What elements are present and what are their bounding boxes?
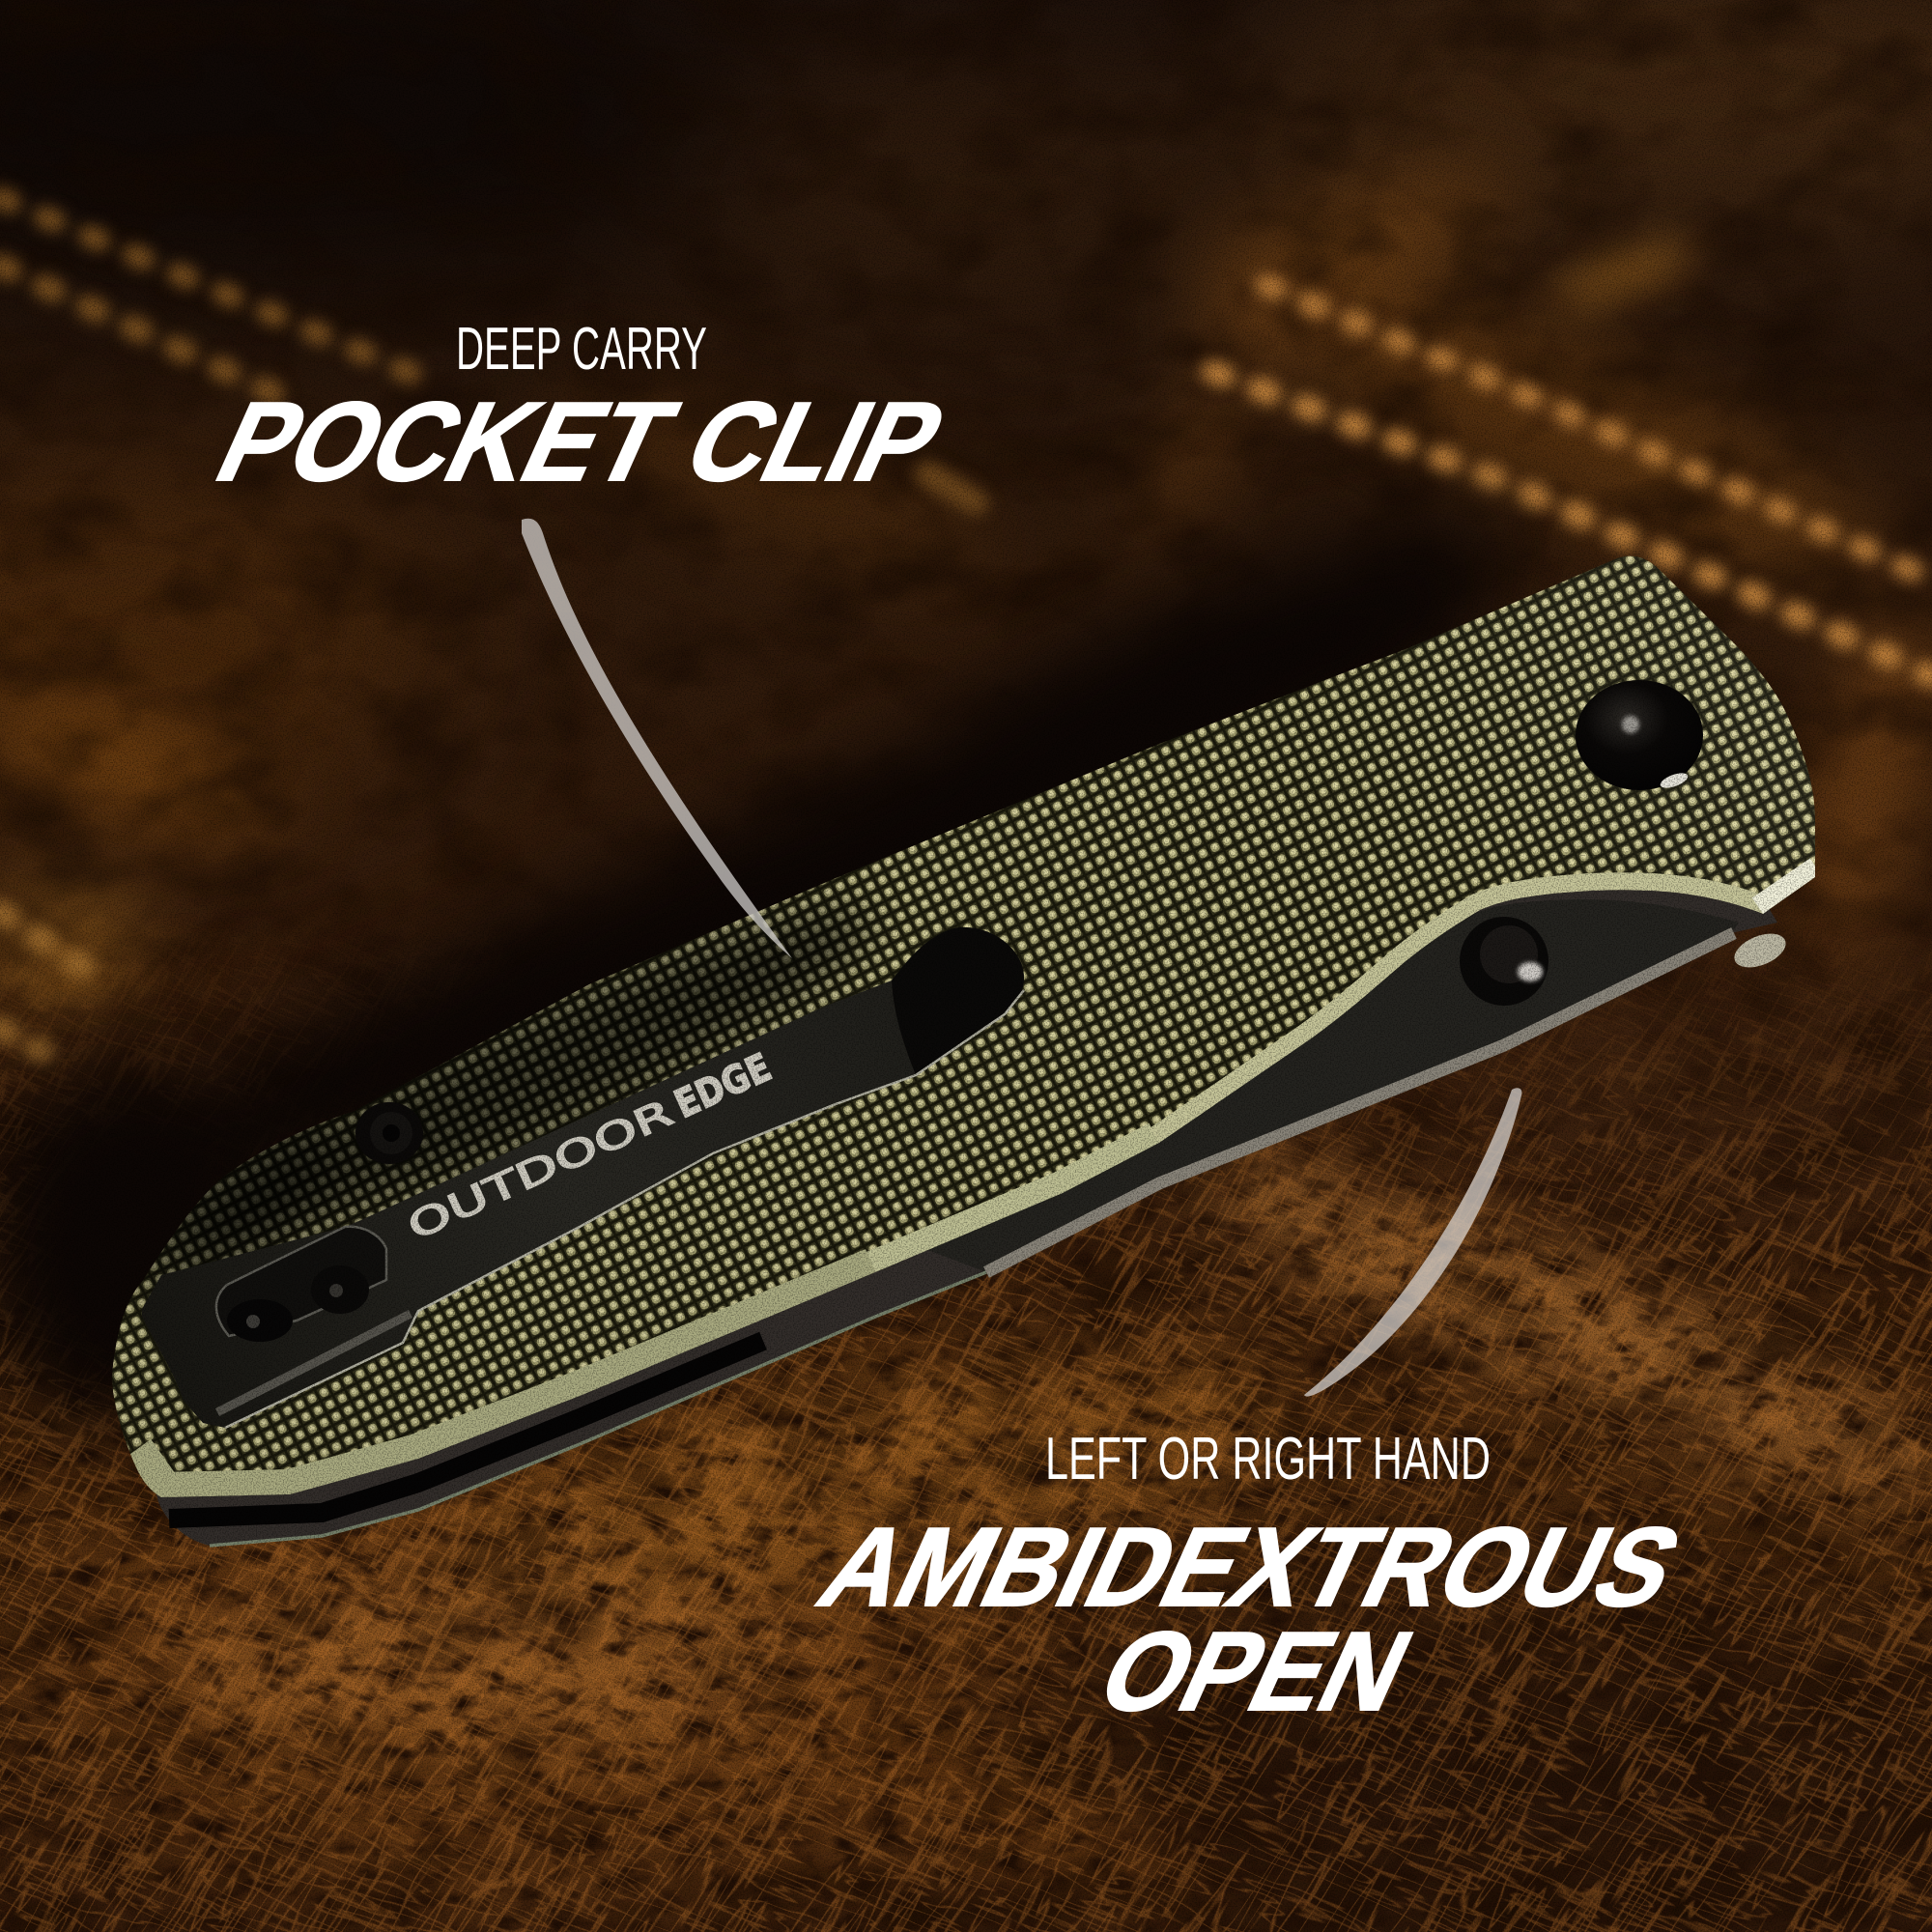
clip logo: EDGE [668, 1045, 778, 1127]
heading: open: OPEN [1081, 1608, 1431, 1734]
knife [103, 556, 1821, 1546]
pivot tab [1729, 927, 1791, 974]
handle edge highlight [130, 874, 1821, 1497]
black liner strip [169, 1341, 763, 1519]
clip screw left [227, 1299, 293, 1342]
subheading: deep carry: DEEP CARRY [456, 316, 707, 383]
handle scale with knurled texture [103, 556, 1815, 1497]
heading: pocket clip: POCKET CLIP [199, 379, 963, 504]
stitching: upper right [1213, 285, 1932, 676]
stitching: lower left [0, 913, 97, 1053]
leather crack texture [0, 966, 1932, 1932]
handle screw [355, 1102, 423, 1164]
blade surface [918, 899, 1739, 1272]
clip recess [216, 1227, 386, 1336]
blade edge [210, 1272, 986, 1546]
pocket clip [142, 927, 1024, 1428]
clip screw right [311, 1265, 369, 1314]
leather vein lines [0, 956, 1932, 1932]
callout: ambidextrous open [802, 1088, 1700, 1734]
subheading: left or right hand: LEFT OR RIGHT HAND [1045, 1426, 1491, 1492]
blade screw [1460, 917, 1548, 1006]
clip logo: OUTDOOR [401, 1091, 679, 1248]
stitching: upper left [0, 198, 976, 502]
knife cast shadow [0, 474, 1536, 1430]
heading: ambidextrous: AMBIDEXTROUS [802, 1504, 1700, 1630]
clip logo [401, 1045, 778, 1249]
callout: pocket clip [199, 316, 963, 958]
blade and lower liner [145, 869, 1777, 1546]
pointer line: ambidextrous open [1304, 1088, 1521, 1397]
pointer line: pocket clip [522, 519, 792, 958]
pivot screw [1576, 680, 1703, 791]
